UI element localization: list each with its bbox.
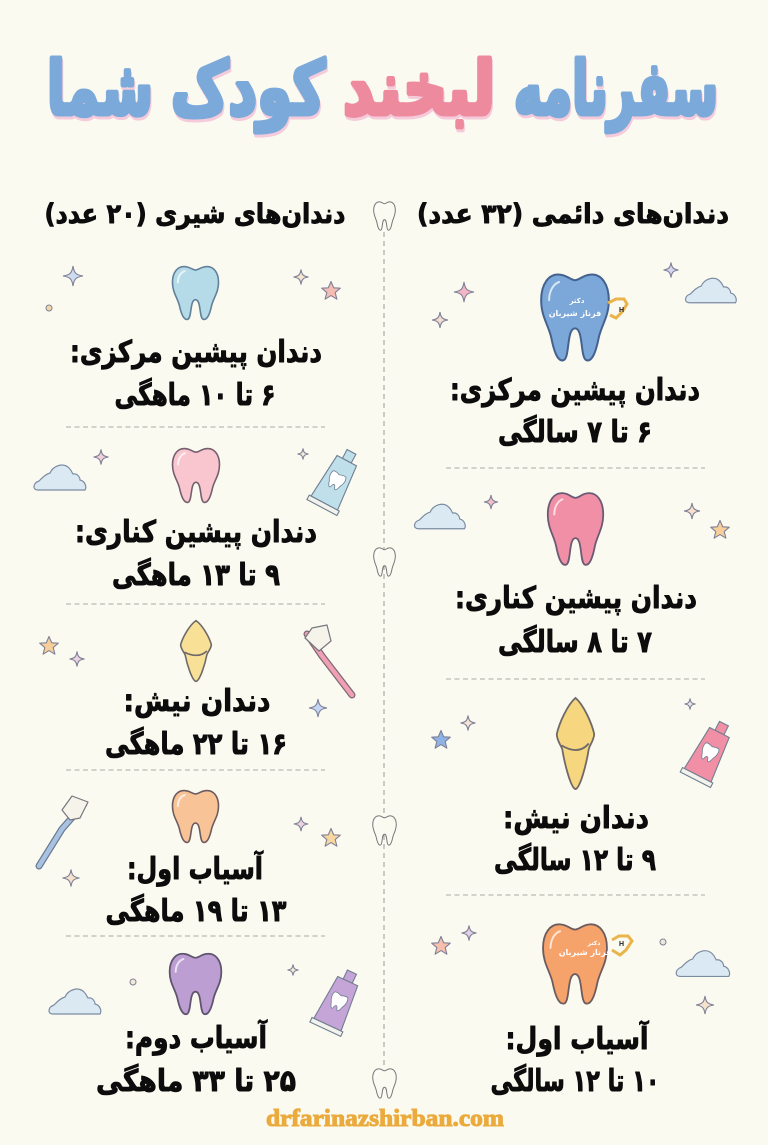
panel: permanent lateral incisor [455, 493, 697, 660]
icon: blue tooth with watermark: H [619, 307, 624, 314]
age range: ۹ تا ۱۲ سالگی [494, 842, 656, 878]
label: دندان پیشین کناری: [455, 581, 697, 616]
icon: light pink tooth [172, 449, 220, 502]
icon: blue tooth with watermark: فرناز شیربان [549, 309, 601, 318]
icon: pink tooth [548, 493, 603, 565]
age range: ۹ تا ۱۳ ماهگی [112, 557, 280, 593]
panel: permanent canine [494, 698, 656, 878]
icon: pink toothpaste tube [680, 716, 739, 787]
title [47, 46, 718, 133]
age range: ۶ تا ۱۰ ماهگی [114, 377, 275, 413]
label: دندان نیش: [124, 684, 270, 719]
icon: peach tooth [172, 791, 219, 842]
label: دندان پیشین مرکزی: [450, 373, 700, 408]
panel: milk central incisor [70, 267, 322, 413]
age range: ۱۰ تا ۱۲ سالگی [490, 1063, 660, 1099]
icon: purple toothpaste tube [310, 965, 367, 1036]
icon: orange tooth with watermark: فرناز شیربان [559, 948, 611, 957]
icon: purple tooth [170, 954, 221, 1014]
decorations: panel 4 left [39, 796, 340, 886]
icon: yellow canine [557, 698, 594, 789]
footer website: drfarinazshirban.com [266, 1106, 504, 1132]
panel: milk first molar [105, 791, 286, 929]
label: آسیاب اول: [506, 1020, 649, 1057]
panel: permanent central incisor [450, 275, 700, 450]
panel: milk second molar [96, 954, 296, 1099]
title: شما [47, 46, 153, 132]
age range: ۲۵ تا ۳۳ ماهگی [96, 1063, 296, 1099]
decorations: panel 5 left [49, 964, 367, 1036]
age range: ۶ تا ۷ سالگی [498, 414, 652, 450]
label: دندان نیش: [503, 801, 649, 836]
decorations: panel 2 right [414, 495, 729, 538]
icon: blue tooth with watermark [541, 275, 627, 360]
panel: milk lateral incisor [75, 449, 317, 593]
panel: permanent first molar [490, 924, 660, 1099]
label: آسیاب اول: [127, 850, 264, 887]
icon: orange tooth with watermark: H [619, 941, 624, 948]
decorations: panel 4 right [432, 926, 730, 1014]
central timeline [373, 202, 396, 1098]
decorations: panel 3 right [432, 698, 739, 787]
label: آسیاب دوم: [125, 1019, 268, 1056]
decorations: panel 3 left [40, 625, 352, 717]
title: لبخند [343, 46, 495, 132]
heading: permanent teeth: دندان‌های دائمی (۳۲ عدد) [417, 199, 729, 230]
icon: blue toothpaste tube [307, 444, 367, 515]
age range: ۷ تا ۸ سالگی [498, 624, 652, 660]
icon: light yellow canine [181, 621, 211, 681]
icon: pink toothbrush [305, 625, 352, 695]
label: دندان پیشین کناری: [75, 515, 317, 550]
decorations: panel 1 left [46, 266, 340, 311]
panel: milk canine [105, 621, 287, 762]
title: کودک [171, 46, 326, 133]
icon: orange tooth with watermark [543, 924, 632, 1004]
decorations: panel 1 right [432, 262, 736, 328]
age range: ۱۶ تا ۲۲ ماهگی [105, 726, 287, 762]
heading: milk teeth: دندان‌های شیری (۲۰ عدد) [44, 199, 346, 230]
icon: blue tooth with watermark: دکتر [569, 297, 585, 305]
decorations: panel 2 left [34, 444, 367, 515]
icon: light blue tooth [172, 267, 219, 319]
label: دندان پیشین مرکزی: [70, 335, 322, 370]
icon: blue toothbrush [39, 796, 88, 866]
icon: orange tooth with watermark: دکتر [587, 940, 600, 947]
age range: ۱۳ تا ۱۹ ماهگی [105, 893, 286, 929]
